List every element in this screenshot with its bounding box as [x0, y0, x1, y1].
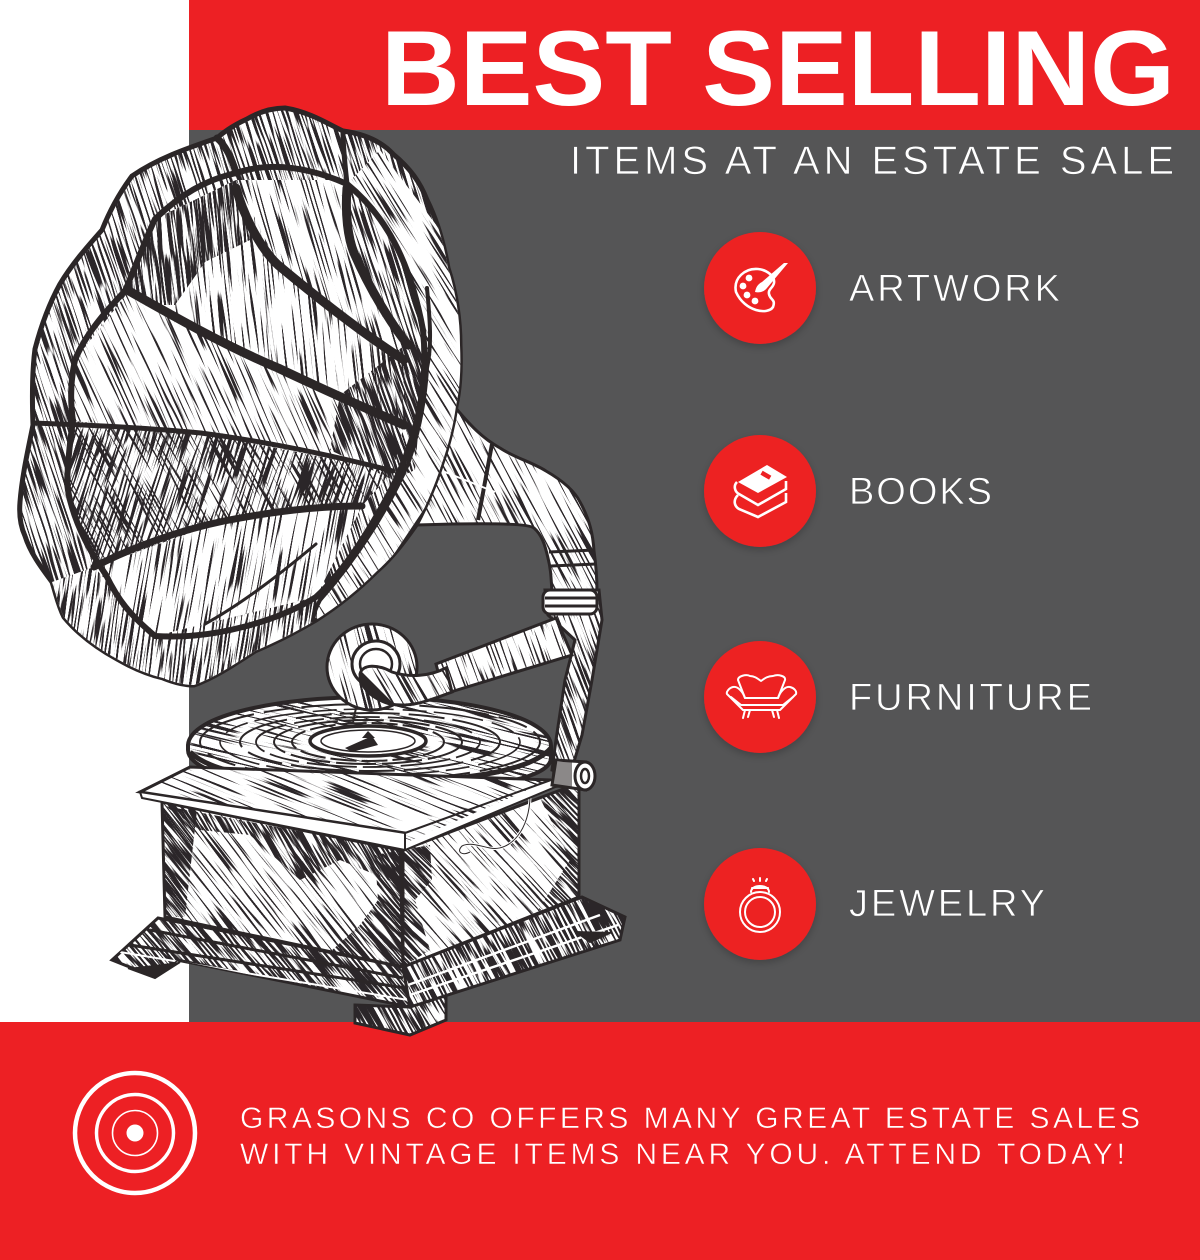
turntable platter	[186, 696, 553, 778]
icon badge: jewelry	[704, 848, 816, 960]
panel 3	[74, 294, 403, 468]
throat shade	[330, 346, 422, 480]
illustration: gramophone	[0, 0, 729, 1221]
tone arm	[434, 616, 574, 692]
panel 2	[132, 180, 404, 420]
icon: palette and brush	[736, 263, 788, 311]
horn neck	[418, 408, 598, 588]
sound box	[326, 622, 454, 722]
cabinet top board	[135, 766, 557, 852]
footer text: WITH VINTAGE ITEMS NEAR YOU. ATTEND TODAY!	[240, 1138, 1125, 1171]
item: books	[704, 435, 992, 547]
item: artwork	[704, 232, 1060, 344]
label: jewelry: JEWELRY	[849, 883, 1045, 925]
panel: dark grey background	[189, 130, 1200, 1022]
icon: target	[75, 1073, 195, 1193]
panel: red title band	[189, 0, 1200, 130]
panel: red footer band	[0, 1022, 1200, 1260]
panel 4	[70, 421, 388, 564]
icon: ring	[740, 878, 780, 932]
panel 5	[98, 510, 360, 634]
panel 1	[236, 180, 408, 356]
footer text: GRASONS CO OFFERS MANY GREAT ESTATE SALES	[240, 1102, 1140, 1135]
item: furniture	[704, 641, 1092, 753]
rim hatching	[22, 110, 432, 634]
footer text	[240, 1102, 1140, 1171]
title: BEST SELLING	[381, 8, 1175, 128]
cabinet body	[160, 788, 580, 966]
cabinet base	[109, 896, 627, 1037]
right rim	[305, 150, 460, 626]
icon: sofa	[727, 675, 796, 718]
icon badge: furniture	[704, 641, 816, 753]
label: artwork: ARTWORK	[849, 268, 1060, 310]
bottom rim	[52, 568, 317, 685]
panel 2 shade	[130, 180, 250, 305]
horn bell	[17, 106, 463, 688]
item: jewelry	[704, 848, 1045, 960]
column and collar	[542, 588, 604, 772]
icon: stacked books	[735, 465, 787, 517]
icon badge: artwork	[704, 232, 816, 344]
ribs and rim lines	[33, 131, 430, 637]
crank knob	[552, 760, 595, 790]
label: furniture: FURNITURE	[849, 677, 1092, 719]
icon badge: books	[704, 435, 816, 547]
label: books: BOOKS	[849, 471, 992, 513]
subtitle: ITEMS AT AN ESTATE SALE	[570, 139, 1174, 183]
